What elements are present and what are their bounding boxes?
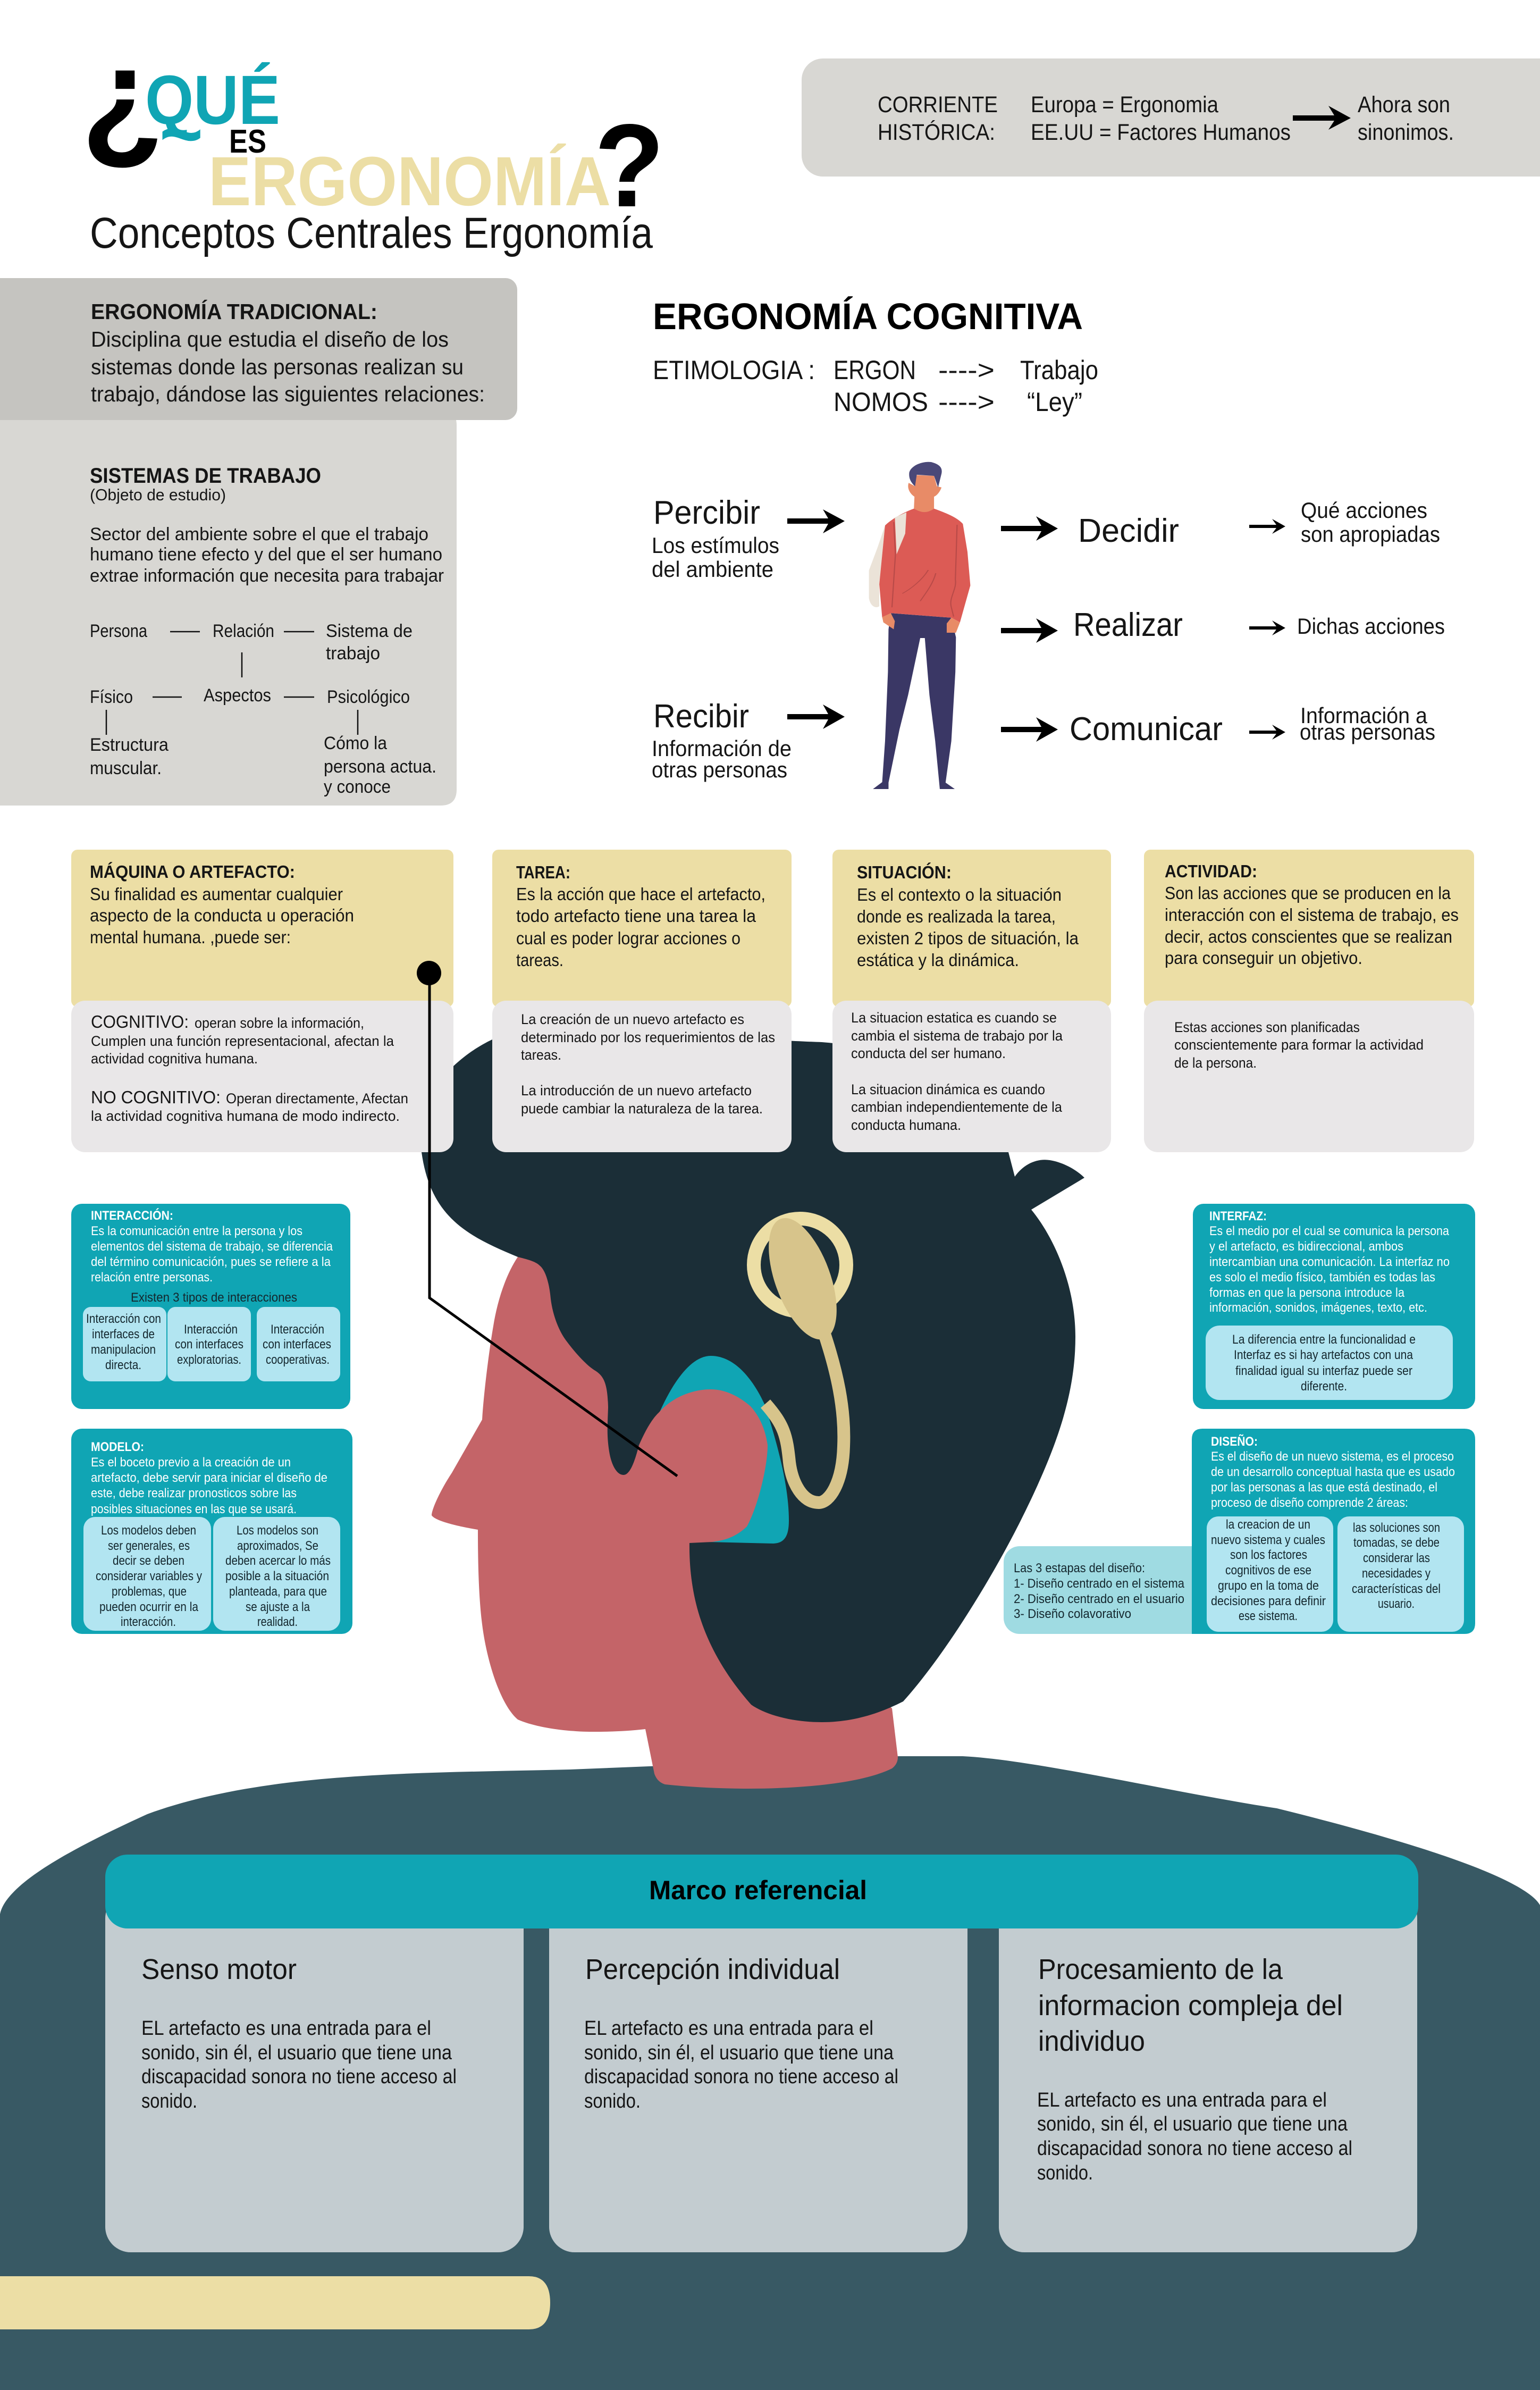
card: situación: existen 2 tipos de situación, la bbox=[857, 928, 1079, 948]
card: senso motor: Senso motor bbox=[141, 1953, 297, 1985]
sub-box: creación: grupo en la toma de bbox=[1218, 1579, 1319, 1593]
relationship diagram: Relación bbox=[213, 621, 274, 641]
heading: TAREA: bbox=[516, 862, 570, 882]
detail: La situacion dinámica es cuando bbox=[851, 1081, 1045, 1097]
arrow: realizar bbox=[1001, 618, 1058, 643]
callout: 3 etapas del diseño: 3- Diseño colavorativo bbox=[1014, 1607, 1131, 1621]
card: percepción individual: EL artefacto es una entrada para el bbox=[584, 2017, 873, 2040]
callout: 3 etapas del diseño: 2- Diseño centrado en el usuario bbox=[1014, 1592, 1184, 1606]
panel: interfaz: intercambian una comunicación. La interfaz no bbox=[1209, 1255, 1450, 1269]
text block: etimología: Trabajo bbox=[1020, 355, 1098, 385]
sub-box: manipulación directa bbox=[83, 1307, 166, 1381]
sub-box: modelos generales: interacción. bbox=[121, 1615, 176, 1629]
sub-box: modelos generales: considerar variables y bbox=[96, 1569, 202, 1583]
sub-box: creación: ese sistema. bbox=[1239, 1609, 1298, 1623]
sub-box: creación: son los factores bbox=[1230, 1548, 1307, 1562]
relationship diagram: Persona bbox=[90, 621, 147, 641]
sub-box: creación: nuevo sistema y cuales bbox=[1211, 1533, 1325, 1547]
panel: modelo bbox=[71, 1429, 352, 1634]
implant tube bbox=[765, 1329, 844, 1503]
detail: conducta humana. bbox=[851, 1117, 961, 1133]
illustration: standing person bbox=[869, 462, 970, 789]
card: tarea: cual es poder lograr acciones o bbox=[516, 928, 740, 948]
sub-box: soluciones: considerar las bbox=[1363, 1551, 1430, 1565]
panel: modelo: MODELO: bbox=[91, 1440, 144, 1454]
panel: interfaz: y el artefacto, es bidireccional, ambos bbox=[1209, 1239, 1403, 1254]
detail bbox=[1174, 1019, 1424, 1071]
face and ear bbox=[432, 1257, 768, 1732]
panel: interacción: relación entre personas. bbox=[91, 1270, 213, 1285]
word ES: ES bbox=[229, 123, 266, 160]
word QUÉ: QUÉ bbox=[145, 61, 280, 139]
sub-box: soluciones: usuario. bbox=[1378, 1597, 1415, 1611]
detail: operan sobre la información, bbox=[195, 1015, 364, 1031]
relationship diagram: Psicológico bbox=[327, 687, 410, 707]
detail: conscientemente para formar la actividad bbox=[1174, 1037, 1424, 1053]
text block: información a otras personas: Información a bbox=[1300, 703, 1428, 728]
panel: diseño bbox=[1192, 1429, 1475, 1634]
sub-box: creación: decisiones para definir bbox=[1211, 1594, 1326, 1608]
detail: La creación de un nuevo artefacto es bbox=[521, 1011, 744, 1027]
panel: interacción: del término comunicación, pues se refiere a la bbox=[91, 1255, 331, 1269]
panel: corriente histórica: CORRIENTE bbox=[878, 92, 998, 118]
sub-box: cooperativas bbox=[257, 1307, 340, 1381]
detail bbox=[91, 1012, 408, 1124]
panel: interfaz: Es el medio por el cual se comunica la persona bbox=[1209, 1224, 1450, 1238]
detail: tareas. bbox=[521, 1047, 561, 1063]
sub-box: diferencia: finalidad igual su interfaz puede ser bbox=[1235, 1364, 1412, 1378]
sub-box: creación: la creacion de un bbox=[1226, 1517, 1310, 1532]
detail: cambia el sistema de trabajo por la bbox=[851, 1028, 1063, 1044]
relationship diagram: muscular. bbox=[90, 758, 162, 778]
relationship diagram bbox=[90, 621, 436, 797]
relationship diagram: Aspectos bbox=[204, 685, 271, 706]
arrow: recibir bbox=[787, 705, 845, 729]
text block: información a otras personas bbox=[1300, 703, 1435, 744]
sub-box: manipulación directa: interfaces de bbox=[92, 1327, 155, 1341]
card: procesamiento: individuo bbox=[1038, 2025, 1145, 2057]
panel: ergonomía tradicional: ERGONOMÍA TRADICIONAL: bbox=[91, 299, 377, 324]
tilde: ~ bbox=[159, 89, 203, 178]
card: tarea: todo artefacto tiene una tarea la bbox=[516, 906, 756, 926]
callout: 3 etapas del diseño bbox=[1004, 1546, 1216, 1634]
sub-box: exploratorias: Interacción bbox=[184, 1322, 238, 1337]
panel: ergonomía tradicional: Disciplina que estudia el diseño de los bbox=[91, 327, 449, 351]
detail: cambian independientemente de la bbox=[851, 1099, 1063, 1115]
text block: recibir bbox=[652, 698, 792, 782]
illustration: head profile with hearing implant bbox=[422, 1034, 1084, 1789]
text block: recibir: Recibir bbox=[653, 698, 749, 735]
teal ear backing bbox=[659, 1356, 789, 1544]
panel: modelo: artefacto, debe servir para iniciar el diseño de bbox=[91, 1471, 327, 1485]
panel: diseño: por las personas a las que está destinado, el bbox=[1211, 1480, 1437, 1495]
relationship diagram: Estructura bbox=[90, 735, 169, 755]
card: tarea: tareas. bbox=[516, 950, 563, 970]
card: situación: donde es realizada la tarea, bbox=[857, 907, 1056, 926]
text block: qué acciones bbox=[1301, 498, 1440, 547]
panel: interacción bbox=[71, 1204, 350, 1409]
sub-box: cooperativas: con interfaces bbox=[263, 1337, 331, 1352]
detail: conducta del ser humano. bbox=[851, 1045, 1006, 1061]
sub-box: modelos aproximados: aproximados, Se bbox=[237, 1539, 318, 1553]
arrow: decidir bbox=[1001, 516, 1058, 541]
card: máquina o artefacto: mental humana. ,puede ser: bbox=[90, 927, 291, 947]
detail bbox=[851, 1010, 1063, 1133]
sub-box: creación: cognitivos de ese bbox=[1225, 1563, 1311, 1578]
panel: corriente histórica: Ahora son bbox=[1358, 92, 1450, 118]
text block: percibir: del ambiente bbox=[652, 557, 773, 582]
sub-box: cooperativas: cooperativas. bbox=[266, 1353, 330, 1367]
panel: interfaz: formas en que la persona introduce la bbox=[1209, 1286, 1405, 1300]
text: dichas acciones: Dichas acciones bbox=[1297, 614, 1445, 639]
text block: etimología: ----> bbox=[938, 387, 995, 417]
sub-box: diferencia: Interfaz es si hay artefactos con una bbox=[1234, 1348, 1413, 1362]
card: máquina o artefacto bbox=[71, 850, 453, 1152]
pointer line from card to ear bbox=[417, 961, 677, 1476]
sub-box: soluciones: características del bbox=[1352, 1582, 1441, 1596]
sub-box: modelos aproximados: Los modelos son bbox=[237, 1523, 318, 1538]
panel: interfaz: INTERFAZ: bbox=[1209, 1209, 1267, 1223]
panel: modelo: posibles situaciones en las que se usará. bbox=[91, 1502, 297, 1516]
arrow: información bbox=[1249, 725, 1285, 740]
card: procesamiento: EL artefacto es una entrada para el bbox=[1037, 2089, 1327, 2111]
panel: interacción: Existen 3 tipos de interacciones bbox=[131, 1290, 297, 1305]
card: máquina o artefacto: Su finalidad es aumentar cualquier bbox=[90, 884, 343, 904]
header bar: marco referencial bbox=[105, 1855, 1418, 1928]
panel: corriente histórica: HISTÓRICA: bbox=[878, 120, 995, 145]
panel: diseño: Es el diseño de un nuevo sistema, es el proceso bbox=[1211, 1449, 1454, 1464]
sub-box: modelos aproximados: deben acercar lo más bbox=[225, 1554, 331, 1568]
text block: percibir: Percibir bbox=[653, 494, 760, 531]
arrow: comunicar bbox=[1001, 717, 1058, 742]
card: actividad: para conseguir un objetivo. bbox=[1165, 948, 1362, 968]
card: percepción individual: sonido, sin él, el usuario que tiene una bbox=[584, 2042, 894, 2064]
neck and face bbox=[908, 475, 941, 514]
detail: la actividad cognitiva humana de modo indirecto. bbox=[91, 1108, 400, 1124]
panel: ergonomía tradicional bbox=[0, 278, 517, 420]
bag bbox=[869, 525, 885, 607]
sub-box: creación bbox=[1207, 1516, 1333, 1632]
sweater folds bbox=[892, 522, 957, 617]
text block: recibir: Información de bbox=[652, 736, 792, 761]
panel: diseño: de un desarrollo conceptual hasta que es usado bbox=[1211, 1465, 1455, 1479]
card: actividad: Son las acciones que se producen en la bbox=[1165, 883, 1451, 903]
sub-box: modelos generales: problemas, que bbox=[112, 1584, 187, 1599]
card: situación bbox=[832, 850, 1111, 1152]
sub-box: manipulación directa: directa. bbox=[105, 1358, 141, 1372]
relationship diagram: trabajo bbox=[326, 643, 380, 664]
panel: corriente histórica: Europa = Ergonomia bbox=[1031, 92, 1218, 118]
card: situación: estática y la dinámica. bbox=[857, 950, 1019, 970]
hands bbox=[882, 613, 960, 633]
detail: puede cambiar la naturaleza de la tarea. bbox=[521, 1101, 763, 1117]
card: actividad: decir, actos conscientes que se realizan bbox=[1165, 927, 1452, 946]
callout: 3 etapas del diseño: 1- Diseño centrado en el sistema bbox=[1014, 1576, 1185, 1591]
panel: ergonomía tradicional: sistemas donde las personas realizan su bbox=[91, 355, 464, 379]
card: máquina o artefacto: aspecto de la conducta u operación bbox=[90, 905, 354, 925]
heading: MÁQUINA O ARTEFACTO: bbox=[90, 862, 295, 882]
illustration: shoulders and body background bbox=[0, 1756, 1540, 2390]
panel: diseño: proceso de diseño comprende 2 áreas: bbox=[1211, 1496, 1408, 1510]
title block bbox=[81, 18, 664, 257]
sub-box: modelos generales: Los modelos deben bbox=[101, 1523, 196, 1538]
accent bar bbox=[0, 2276, 550, 2329]
sub-box: modelos generales bbox=[83, 1517, 211, 1631]
panel: interacción: Es la comunicación entre la persona y los bbox=[91, 1224, 302, 1238]
closing question mark: ? bbox=[594, 100, 664, 232]
sub-box: exploratorias: con interfaces bbox=[175, 1337, 243, 1352]
panel: sistemas de trabajo: (Objeto de estudio) bbox=[90, 485, 226, 504]
detail: actividad cognitiva humana. bbox=[91, 1051, 258, 1067]
detail: COGNITIVO: bbox=[91, 1012, 189, 1032]
label: realizar: Realizar bbox=[1073, 607, 1183, 643]
arrow: qué acciones bbox=[1249, 519, 1285, 534]
label: comunicar: Comunicar bbox=[1070, 711, 1223, 748]
sweater bbox=[879, 509, 970, 622]
arrow: dichas acciones bbox=[1249, 620, 1285, 635]
panel: interacción: INTERACCIÓN: bbox=[91, 1208, 173, 1223]
label: decidir: Decidir bbox=[1078, 513, 1179, 549]
relationship diagram: Cómo la bbox=[324, 733, 387, 753]
card: tarea bbox=[492, 850, 792, 1152]
panel: sistemas de trabajo: extrae información que necesita para trabajar bbox=[90, 566, 444, 586]
card: senso motor: EL artefacto es una entrada para el bbox=[141, 2017, 431, 2040]
text block: etimología: ETIMOLOGIA : bbox=[653, 355, 815, 385]
opening question mark: ¿ bbox=[81, 18, 164, 174]
strap bbox=[895, 513, 906, 555]
text block: percibir: Los estímulos bbox=[652, 533, 779, 558]
detail: Cumplen una función representacional, afectan la bbox=[91, 1033, 394, 1049]
text block: etimología: ----> bbox=[938, 355, 995, 385]
arrow: percibir bbox=[787, 509, 845, 533]
text block: etimología: “Ley” bbox=[1027, 387, 1082, 417]
panel: modelo: Es el boceto previo a la creación de un bbox=[91, 1455, 291, 1470]
sub-box: modelos generales: decir se deben bbox=[113, 1554, 184, 1568]
sub-box: soluciones: tomadas, se debe bbox=[1353, 1536, 1440, 1550]
card: actividad bbox=[1144, 850, 1474, 1152]
detail: Estas acciones son planificadas bbox=[1174, 1019, 1360, 1035]
card: percepción individual: discapacidad sonora no tiene acceso al bbox=[584, 2066, 898, 2088]
sub-box: diferencia bbox=[1206, 1326, 1453, 1400]
heading: SITUACIÓN: bbox=[857, 862, 952, 882]
sub-box: diferencia: diferente. bbox=[1301, 1379, 1347, 1394]
card: procesamiento: informacion compleja del bbox=[1038, 1990, 1343, 2022]
sub-box: modelos generales: pueden ocurrir en la bbox=[99, 1600, 199, 1614]
panel: interfaz bbox=[1193, 1204, 1475, 1409]
sub-box: modelos generales: ser generales, es bbox=[108, 1539, 190, 1553]
sub-box: soluciones: necesidades y bbox=[1362, 1566, 1430, 1581]
callout: 3 etapas del diseño: Las 3 estapas del diseño: bbox=[1014, 1561, 1145, 1575]
sub-box: cooperativas: Interacción bbox=[271, 1322, 324, 1337]
header bar: marco referencial: Marco referencial bbox=[649, 1875, 867, 1905]
card: procesamiento: sonido. bbox=[1037, 2162, 1093, 2184]
text block: recibir: otras personas bbox=[652, 757, 787, 782]
sub-box: modelos aproximados: planteada, para que bbox=[229, 1584, 327, 1599]
panel: corriente histórica: sinonimos. bbox=[1358, 120, 1454, 145]
card: situación: Es el contexto o la situación bbox=[857, 885, 1062, 904]
panel: interfaz: es solo el medio físico, también es todas las bbox=[1209, 1270, 1435, 1285]
sub-box: modelos aproximados: posible a la situación bbox=[225, 1569, 329, 1583]
panel: interfaz: información, sonidos, imágenes, texto, etc. bbox=[1209, 1301, 1427, 1315]
heading: ACTIVIDAD: bbox=[1165, 861, 1257, 881]
detail: La introducción de un nuevo artefacto bbox=[521, 1083, 752, 1098]
card: procesamiento: discapacidad sonora no tiene acceso al bbox=[1037, 2137, 1352, 2160]
hair bbox=[422, 1034, 1084, 1722]
sub-box: manipulación directa: manipulacion bbox=[91, 1343, 156, 1357]
card: senso motor bbox=[105, 1893, 524, 2252]
card: senso motor: sonido, sin él, el usuario que tiene una bbox=[141, 2042, 452, 2064]
implant processor bbox=[755, 1209, 851, 1348]
sub-box: modelos aproximados: se ajuste a la bbox=[246, 1600, 310, 1614]
card: percepción individual: Percepción individual bbox=[585, 1953, 840, 1985]
card: procesamiento bbox=[999, 1893, 1417, 2252]
sub-box: exploratorias bbox=[167, 1307, 251, 1381]
panel: corriente histórica: EE.UU = Factores Humanos bbox=[1031, 120, 1291, 145]
panel: diseño: DISEÑO: bbox=[1211, 1434, 1258, 1449]
relationship diagram: y conoce bbox=[324, 777, 391, 797]
card: procesamiento: Procesamiento de la bbox=[1038, 1953, 1283, 1985]
card: percepción individual: sonido. bbox=[584, 2090, 641, 2112]
card: senso motor: sonido. bbox=[141, 2090, 197, 2112]
detail: NO COGNITIVO: bbox=[91, 1087, 221, 1107]
panel: sistemas de trabajo bbox=[0, 409, 457, 806]
card: actividad: interacción con el sistema de trabajo, es bbox=[1165, 905, 1459, 925]
sub-box: manipulación directa: Interacción con bbox=[86, 1312, 161, 1326]
heading: ergonomía cognitiva: ERGONOMÍA COGNITIVA bbox=[653, 296, 1083, 337]
panel: corriente histórica bbox=[802, 58, 1540, 177]
text block: información a otras personas: otras personas bbox=[1300, 719, 1435, 744]
text block: qué acciones: Qué acciones bbox=[1301, 498, 1427, 523]
panel: interacción: elementos del sistema de trabajo, se diferencia bbox=[91, 1239, 333, 1254]
description: Sector del ambiente sobre el que el trabajo bbox=[90, 524, 428, 544]
word ERGONOMÍA: ERGONOMÍA bbox=[208, 142, 611, 220]
text block: etimología: ERGON bbox=[834, 355, 916, 385]
detail: determinado por los requerimientos de las bbox=[521, 1029, 775, 1045]
subtitle: Conceptos Centrales Ergonomía bbox=[90, 209, 653, 257]
sub-box: modelos aproximados bbox=[213, 1517, 340, 1631]
text block: etimología bbox=[653, 355, 1098, 417]
relationship diagram: Físico bbox=[90, 687, 133, 707]
card: percepción individual bbox=[549, 1893, 967, 2252]
sub-box: modelos aproximados: realidad. bbox=[257, 1615, 298, 1629]
heading: SISTEMAS DE TRABAJO bbox=[90, 464, 321, 488]
relationship diagram: Sistema de bbox=[326, 621, 413, 641]
section: marco referencial bbox=[105, 1855, 1418, 2252]
sub-box: diferencia: La diferencia entre la funcionalidad e bbox=[1232, 1332, 1416, 1347]
sub-box: exploratorias: exploratorias. bbox=[177, 1353, 241, 1367]
panel: sistemas de trabajo: humano tiene efecto y del que el ser humano bbox=[90, 544, 442, 565]
panel: ergonomía tradicional: trabajo, dándose las siguientes relaciones: bbox=[91, 382, 485, 406]
neck bbox=[645, 1542, 898, 1789]
relationship diagram: persona actua. bbox=[324, 757, 436, 777]
text block: percibir bbox=[652, 494, 779, 582]
sub-box: soluciones: las soluciones son bbox=[1353, 1521, 1440, 1535]
card: tarea: Es la acción que hace el artefacto, bbox=[516, 884, 765, 904]
card: procesamiento: sonido, sin él, el usuario que tiene una bbox=[1037, 2113, 1348, 2135]
card: senso motor: discapacidad sonora no tiene acceso al bbox=[141, 2066, 457, 2088]
sub-box: soluciones bbox=[1337, 1516, 1464, 1632]
panel: modelo: este, debe realizar pronosticos sobre las bbox=[91, 1486, 297, 1500]
implant ring bbox=[754, 1219, 846, 1311]
detail bbox=[521, 1011, 775, 1117]
trousers bbox=[873, 613, 956, 789]
detail: La situacion estatica es cuando se bbox=[851, 1010, 1057, 1026]
detail: de la persona. bbox=[1174, 1055, 1257, 1071]
hair bbox=[909, 462, 942, 488]
detail: Operan directamente, Afectan bbox=[226, 1091, 408, 1106]
text block: etimología: NOMOS bbox=[834, 387, 928, 417]
text block: qué acciones: son apropiadas bbox=[1301, 522, 1440, 547]
arrow: sinónimos bbox=[1293, 106, 1351, 130]
